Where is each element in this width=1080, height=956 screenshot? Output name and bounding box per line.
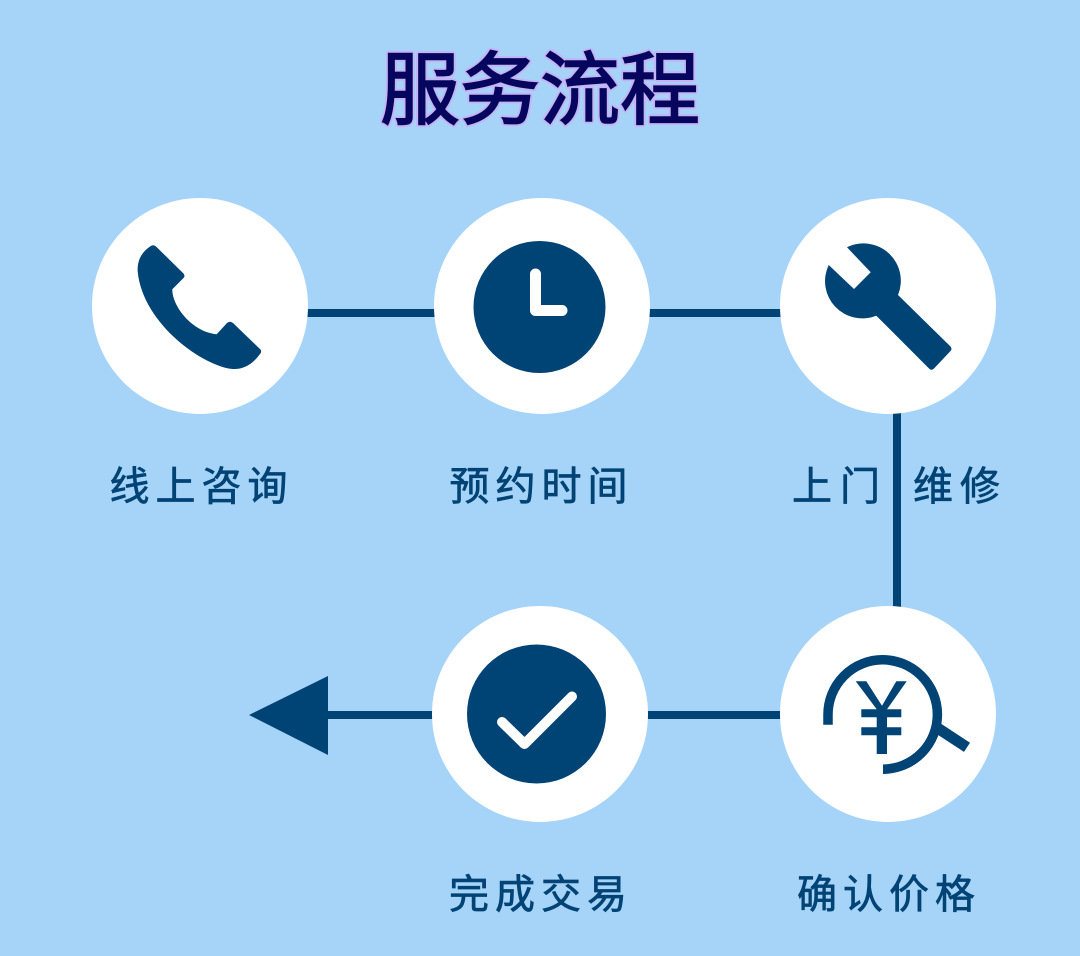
circle <box>92 198 308 414</box>
step: book a time <box>434 198 650 509</box>
label: 上门维修 <box>792 465 1000 509</box>
circle <box>780 198 996 414</box>
arrow: completion to end <box>249 676 436 755</box>
circle <box>780 606 996 822</box>
step: confirm price <box>780 606 996 917</box>
connector: repair to price <box>893 410 901 610</box>
icon: wrench <box>825 243 952 370</box>
label: 确认价格 <box>797 873 981 917</box>
label: 线上咨询 <box>110 465 294 509</box>
circle <box>434 198 650 414</box>
connector: appointment to repair <box>645 309 785 317</box>
title: 服务流程 <box>380 46 700 135</box>
step: on-site repair <box>780 198 1000 509</box>
icon: yen magnifier <box>828 660 967 769</box>
label: 预约时间 <box>450 465 634 509</box>
label: 完成交易 <box>449 873 633 917</box>
circle <box>432 606 648 822</box>
icon: clock <box>474 241 606 373</box>
connector: consult to appointment <box>300 309 440 317</box>
step: deal completed <box>432 606 648 917</box>
title: 服务流程 <box>380 46 700 135</box>
icon: check mark <box>467 644 606 784</box>
step: online consultation <box>92 198 308 509</box>
connector: price to completion <box>645 711 785 719</box>
icon: phone <box>138 245 261 369</box>
